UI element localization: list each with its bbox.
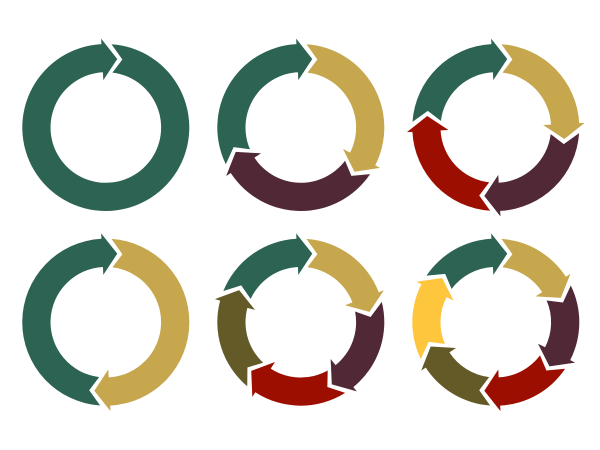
panel: cycle with four arrows [407,39,585,216]
arrow 5: olive [413,329,502,427]
arrow 5: olive [192,284,282,389]
arrow 1: green [426,233,507,289]
arrow 3: maroon [484,133,579,216]
arrow 4: red [239,334,350,440]
panel: cycle with two arrows [22,233,189,411]
arrow 2: gold [263,37,420,182]
arrow 3: maroon [305,295,416,401]
panel: cycle with six arrows [384,218,600,427]
panel: cycle with one arrow [22,39,189,211]
arrow 3: maroon [519,279,600,377]
arrow 1: green [217,39,312,164]
arrow 3: maroon [218,99,374,244]
arrow 6: yellow [384,268,473,366]
arrow 2: gold [490,218,579,316]
arrow 4: red [484,355,565,411]
arrow 4: red [407,116,490,211]
panel: cycle with three arrows [217,37,420,244]
arrow 2: gold [501,44,585,139]
panel: cycle with five arrows [192,221,416,440]
arrow 1: green [223,233,312,299]
arrow 1: green [412,39,507,122]
arrow 1: green [22,233,117,406]
arrow 2: gold [299,221,389,326]
arrow 2: gold [94,239,189,411]
arrow 1: green [22,39,189,211]
